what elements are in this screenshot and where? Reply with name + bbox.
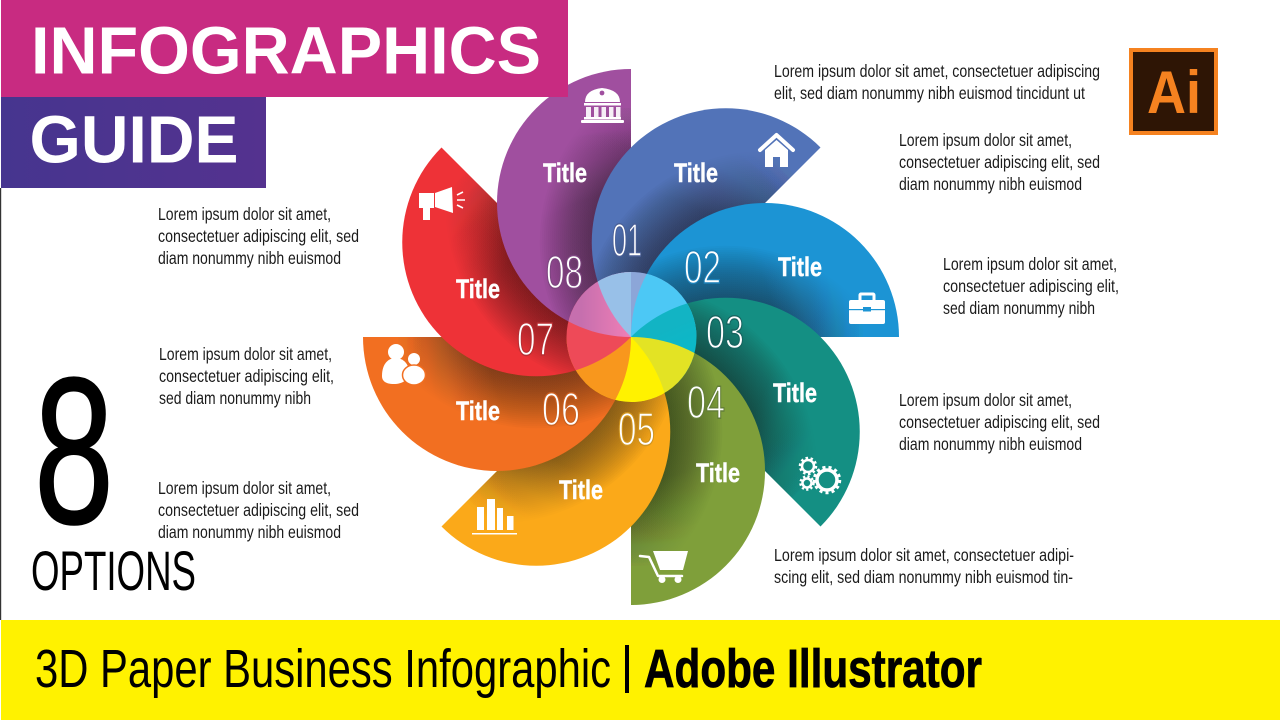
petal 06 orange bbox=[363, 337, 616, 471]
text block: right: sed diam nonummy nibh bbox=[943, 298, 1095, 318]
petal 05 amber bbox=[442, 393, 670, 566]
petal 01 blue bbox=[592, 108, 820, 282]
icon: briefcase bbox=[849, 294, 885, 324]
text block: right: consectetuer adipiscing elit, bbox=[943, 276, 1119, 296]
petal 04 green bbox=[631, 353, 765, 605]
petal numbers: 08 bbox=[546, 246, 583, 298]
petal numbers: 06 bbox=[542, 383, 580, 435]
text block: upper right: Lorem ipsum dolor sit amet, bbox=[899, 130, 1072, 150]
petal titles: Title bbox=[456, 396, 500, 426]
text block: upper left: consectetuer adipiscing elit, sed bbox=[158, 226, 359, 246]
petal titles: Title bbox=[456, 274, 500, 304]
big number 8: 8 bbox=[34, 335, 114, 568]
text block: lower right: diam nonummy nibh euismod bbox=[899, 434, 1082, 454]
logo: Adobe Illustrator: Ai bbox=[1147, 59, 1201, 126]
petal 08 purple bbox=[497, 69, 631, 322]
text block: top centre: elit, sed diam nonummy nibh euismod tincidunt ut bbox=[774, 83, 1085, 103]
text block: upper left: Lorem ipsum dolor sit amet, bbox=[158, 204, 331, 224]
petal numbers: 05 bbox=[618, 403, 655, 455]
text block: middle left: consectetuer adipiscing elit, bbox=[159, 366, 334, 386]
text block: lower right bbox=[899, 390, 1100, 454]
text block: lower left: consectetuer adipiscing elit, sed bbox=[158, 500, 359, 520]
text block: upper right: consectetuer adipiscing elit, sed bbox=[899, 152, 1100, 172]
text block: upper right: diam nonummy nibh euismod bbox=[899, 174, 1082, 194]
text block: bottom centre bbox=[774, 545, 1074, 587]
footer title bar: 3D Paper Business Infographic bbox=[35, 639, 611, 699]
text block: lower left: Lorem ipsum dolor sit amet, bbox=[158, 478, 331, 498]
heading: guide banner: GUIDE bbox=[30, 102, 238, 178]
heading: guide banner bbox=[1, 97, 266, 188]
petal numbers bbox=[517, 214, 744, 455]
icon: people bbox=[382, 344, 426, 385]
footer title bar: Adobe Illustrator bbox=[644, 639, 982, 699]
translucent centre circle bbox=[566, 272, 696, 402]
heading: infographics banner: INFOGRAPHICS bbox=[31, 14, 541, 88]
text block: upper left: diam nonummy nibh euismod bbox=[158, 248, 341, 268]
petal titles bbox=[456, 158, 822, 505]
text block: lower left: diam nonummy nibh euismod bbox=[158, 522, 341, 542]
text block: lower right: consectetuer adipiscing elit, sed bbox=[899, 412, 1100, 432]
petal titles: Title bbox=[696, 458, 740, 488]
petal 07 red bbox=[402, 148, 576, 376]
petal titles: Title bbox=[778, 252, 822, 282]
text block: top centre bbox=[774, 61, 1100, 103]
pinwheel petals bbox=[363, 69, 899, 605]
text block: right: Lorem ipsum dolor sit amet, bbox=[943, 254, 1117, 274]
text block: upper left bbox=[158, 204, 359, 268]
text block: bottom centre: scing elit, sed diam nonummy nibh euismod tin- bbox=[774, 567, 1073, 587]
petal titles: Title bbox=[543, 158, 587, 188]
text block: upper right bbox=[899, 130, 1100, 194]
petal titles: Title bbox=[674, 158, 718, 188]
petal numbers: 01 bbox=[612, 214, 642, 266]
left edge line bbox=[0, 188, 1, 620]
icon: bar chart bbox=[472, 499, 517, 534]
petal numbers: 02 bbox=[684, 241, 721, 293]
text block: middle left: sed diam nonummy nibh bbox=[159, 388, 311, 408]
icon: shopping cart bbox=[640, 551, 688, 583]
footer title bar bbox=[1, 620, 1280, 720]
petal titles: Title bbox=[773, 378, 817, 408]
petal titles: Title bbox=[559, 475, 603, 505]
icon: gears bbox=[800, 458, 840, 492]
logo: Adobe Illustrator bbox=[1131, 50, 1216, 133]
text block: lower right: Lorem ipsum dolor sit amet, bbox=[899, 390, 1072, 410]
text block: middle left: Lorem ipsum dolor sit amet, bbox=[159, 344, 332, 364]
petal numbers: 07 bbox=[517, 313, 554, 365]
text block: middle left bbox=[159, 344, 334, 408]
petal 02 sky blue bbox=[646, 203, 899, 337]
icon: megaphone bbox=[419, 187, 465, 220]
icon: house bbox=[760, 135, 793, 167]
petal 01 overlap on petal 08 bbox=[592, 148, 631, 282]
icon: bank building bbox=[581, 88, 624, 123]
text block: bottom centre: Lorem ipsum dolor sit amet, consectetuer adipi- bbox=[774, 545, 1074, 565]
petal 03 teal bbox=[687, 298, 860, 526]
text block: right bbox=[943, 254, 1119, 318]
text block: lower left bbox=[158, 478, 359, 542]
petal numbers: 04 bbox=[687, 376, 725, 428]
text block: top centre: Lorem ipsum dolor sit amet, consectetuer adipiscing bbox=[774, 61, 1100, 81]
petal numbers: 03 bbox=[706, 306, 744, 358]
options label: OPTIONS bbox=[31, 539, 196, 602]
